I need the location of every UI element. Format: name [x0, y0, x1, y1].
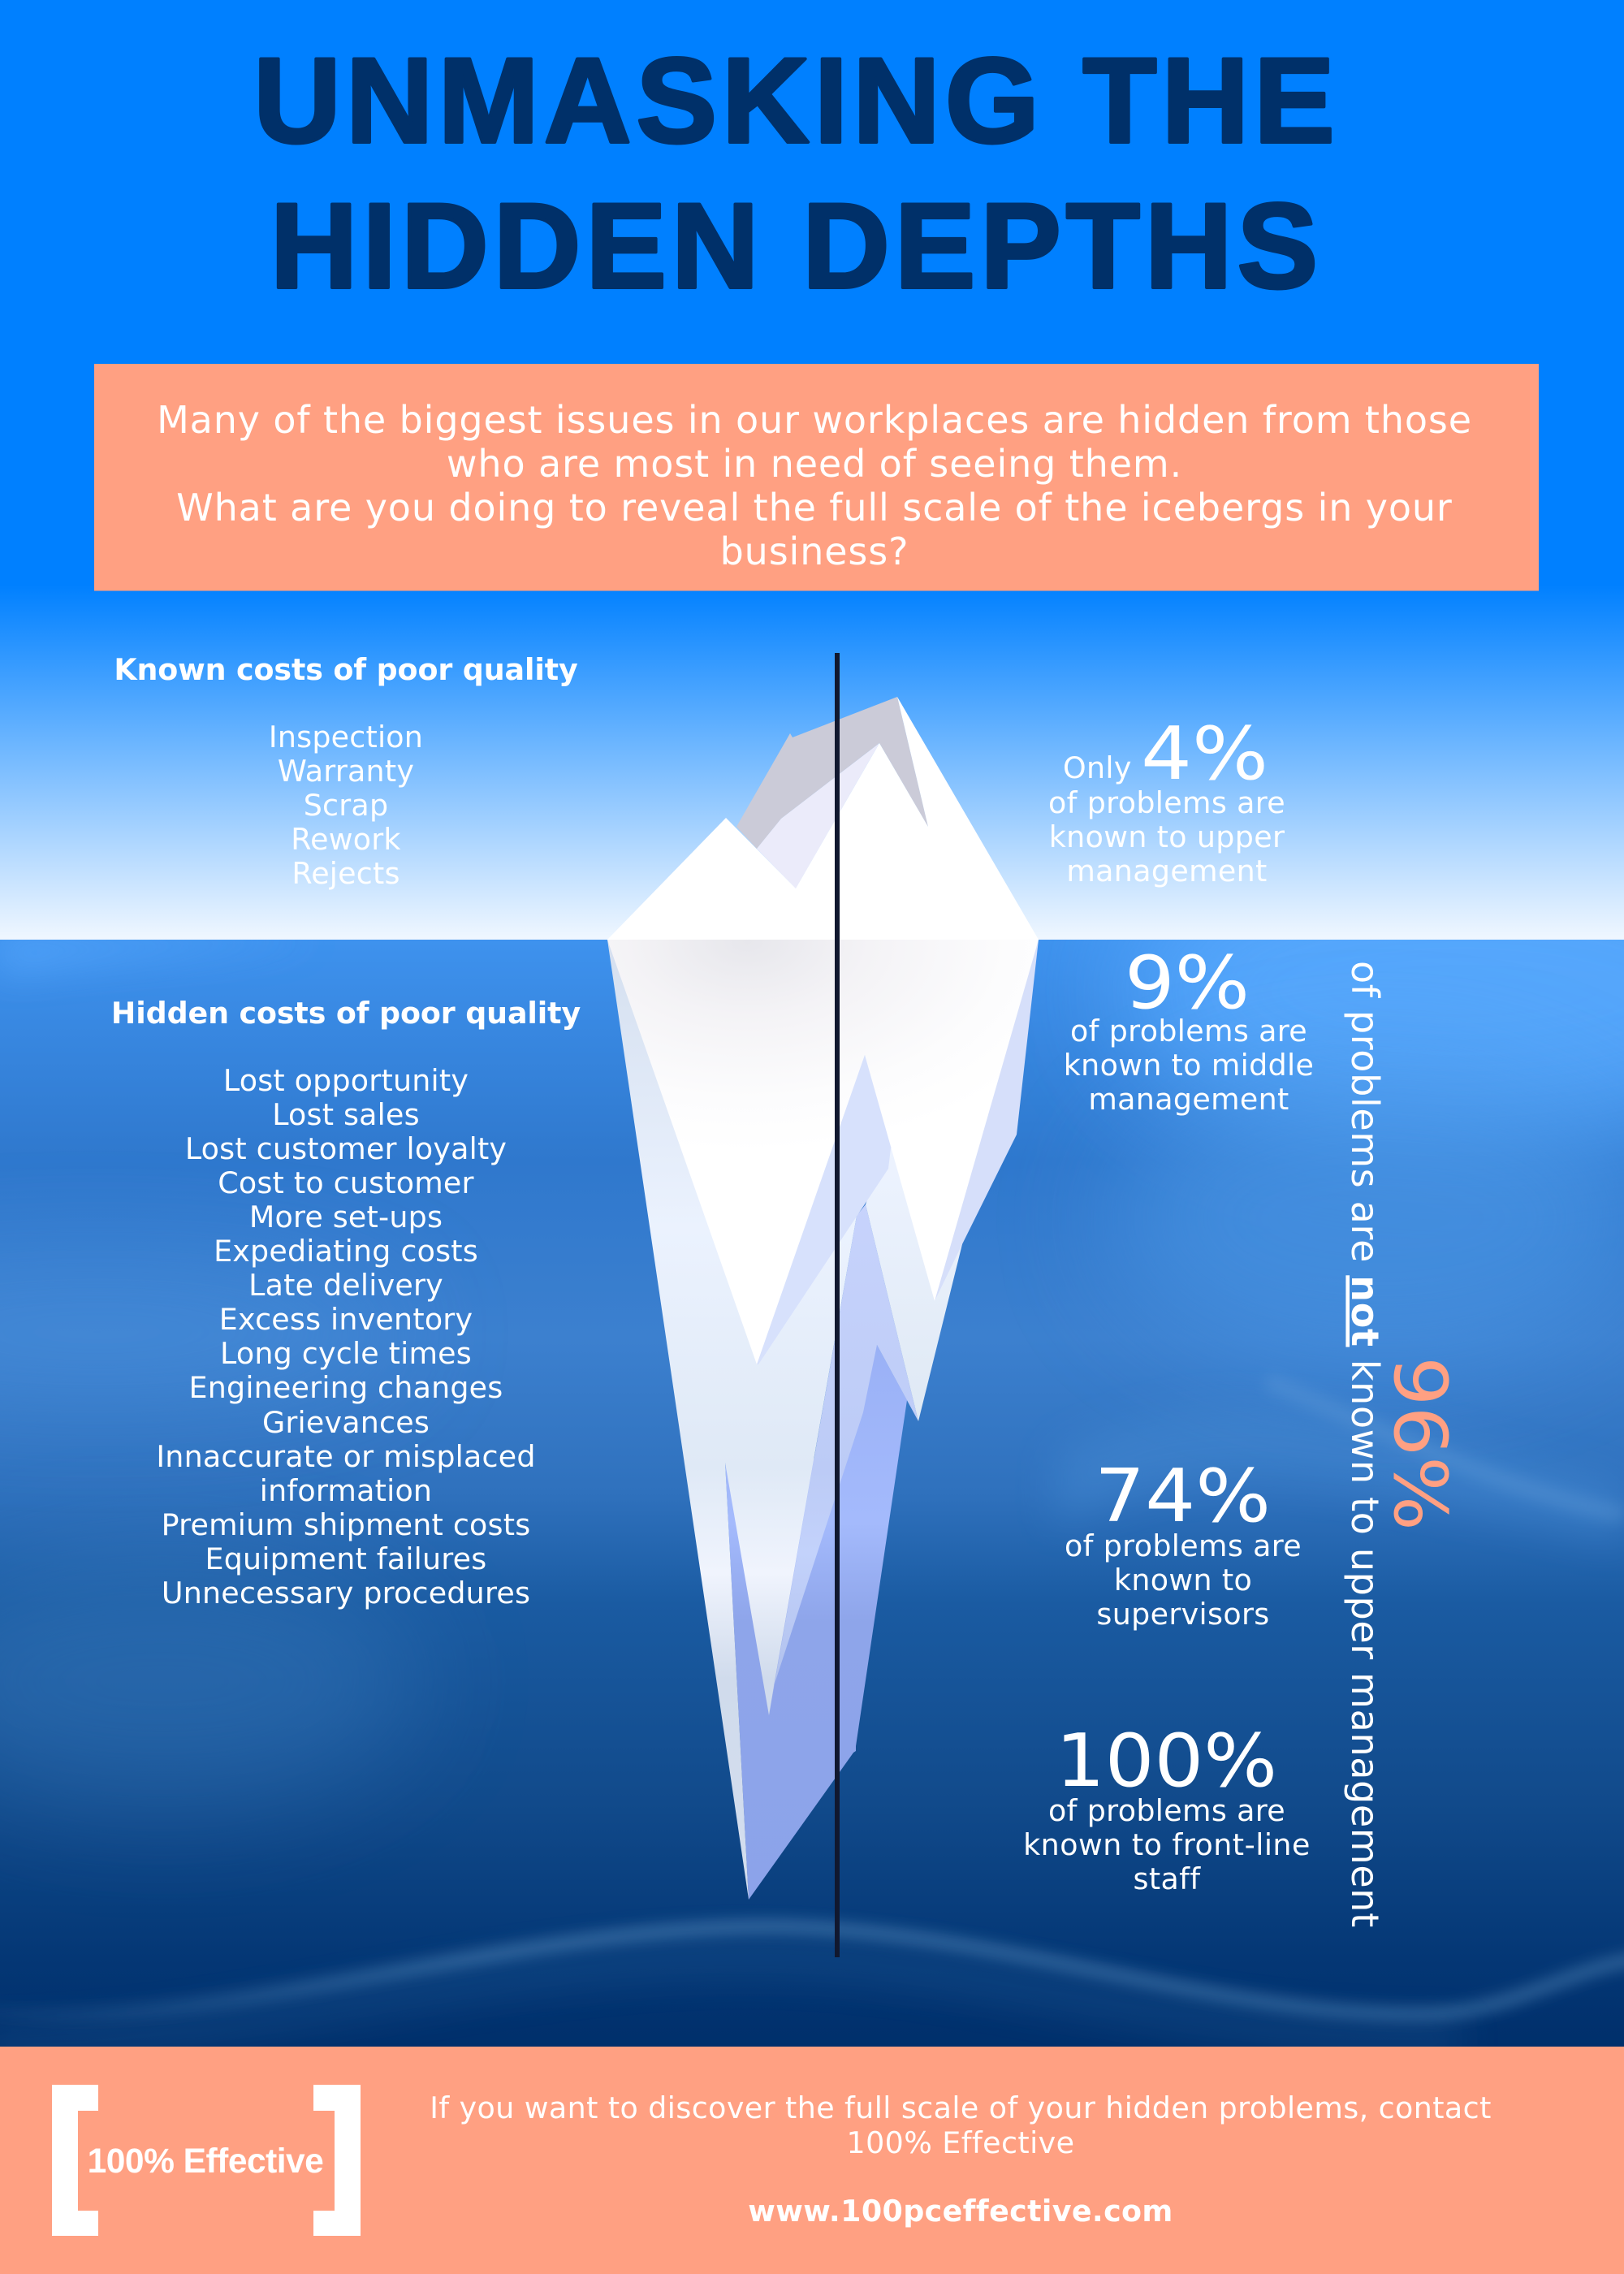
stat: 4 percent upper management: Only [1063, 750, 1132, 785]
stat: 74 percent supervisors: 74% [1095, 1454, 1271, 1539]
hidden costs list: Innaccurate or misplaced [156, 1439, 536, 1474]
title: UNMASKING THE [253, 32, 1340, 168]
vertical 96 percent: 96% [1377, 1356, 1462, 1531]
stat: 4 percent upper management: of problems are [1048, 785, 1285, 820]
hidden costs list: Lost opportunity [223, 1063, 469, 1098]
stat: 9 percent middle management: of problems are [1070, 1014, 1307, 1048]
known costs list: Warranty [278, 754, 414, 789]
stat: 4 percent upper management: management [1066, 854, 1268, 888]
known costs list: Rework [291, 822, 401, 857]
title: HIDDEN DEPTHS [270, 178, 1323, 313]
stat: 9 percent middle management [1064, 940, 1314, 1117]
hidden costs list: Cost to customer [218, 1165, 474, 1200]
iceberg: mid blue facet [769, 1204, 918, 1715]
call to action: If you want to discover the full scale of your hidden problems, contact [430, 2090, 1492, 2125]
iceberg: pale left body [607, 940, 888, 1900]
hidden costs list: Grievances [262, 1405, 430, 1440]
stat: 9 percent middle management: 9% [1125, 940, 1250, 1026]
sky background [0, 0, 1624, 940]
iceberg: lavender centre facet [757, 1055, 897, 1364]
iceberg: pale right facet [866, 1137, 962, 1421]
hidden costs list: Excess inventory [219, 1302, 473, 1337]
hidden costs list: Lost sales [272, 1097, 420, 1132]
stat: 100 percent front-line staff: known to front-line [1023, 1827, 1311, 1862]
iceberg: white main underwater face [607, 940, 1039, 1364]
call to action [430, 2090, 1492, 2229]
stat: 100 percent front-line staff: staff [1134, 1861, 1201, 1896]
vertical statement: of problems are not known to upper management [1343, 961, 1387, 1928]
hidden costs list: Hidden costs of poor quality [111, 996, 581, 1031]
stat: 4 percent upper management: known to upper [1049, 819, 1285, 854]
intro panel [94, 364, 1539, 591]
logo: 100% Effective [88, 2142, 323, 2181]
stat: 9 percent middle management: management [1088, 1082, 1289, 1117]
hidden costs list: More set-ups [249, 1200, 443, 1234]
hidden costs list: Late delivery [248, 1268, 443, 1303]
iceberg: back peak shadow [736, 697, 928, 849]
iceberg illustration [607, 697, 1039, 1900]
iceberg: lavender peak face [757, 743, 879, 888]
hidden costs list: Lost customer loyalty [185, 1131, 507, 1166]
hidden costs list: Premium shipment costs [162, 1507, 530, 1542]
intro panel: business? [720, 530, 909, 573]
vertical divider line [835, 653, 840, 1957]
stat: 100 percent front-line staff [1023, 1718, 1311, 1896]
iceberg: white front above water [607, 697, 1039, 940]
stat: 74 percent supervisors: of problems are [1065, 1528, 1302, 1563]
known costs list: Rejects [292, 856, 400, 891]
call to action: www.100pceffective.com [748, 2194, 1173, 2229]
stat: 100 percent front-line staff: 100% [1056, 1718, 1277, 1804]
known costs list: Known costs of poor quality [114, 652, 578, 687]
stat: 4 percent upper management [1048, 711, 1285, 888]
logo [52, 2085, 361, 2236]
intro panel: What are you doing to reveal the full scale of the icebergs in your [176, 486, 1453, 530]
iceberg: lavender right facet [935, 940, 1039, 1301]
intro panel: who are most in need of seeing them. [447, 442, 1182, 486]
stat: 100 percent front-line staff: of problems are [1048, 1793, 1285, 1828]
hidden costs list: information [260, 1473, 432, 1508]
known costs list [114, 652, 578, 891]
sea background with soft waves [0, 837, 1624, 2047]
hidden costs list: Unnecessary procedures [162, 1576, 530, 1610]
stat: 74 percent supervisors: supervisors [1096, 1597, 1270, 1632]
hidden costs list: Long cycle times [220, 1336, 472, 1371]
hidden costs list: Expediating costs [214, 1234, 478, 1269]
hidden costs list [111, 996, 581, 1610]
stat: 74 percent supervisors [1065, 1454, 1302, 1632]
footer panel [0, 2047, 1624, 2274]
known costs list: Inspection [269, 720, 423, 754]
hidden costs list: Engineering changes [189, 1370, 503, 1405]
stat: 4 percent upper management: 4% [1141, 711, 1268, 797]
call to action: 100% Effective [847, 2125, 1074, 2160]
stat: 9 percent middle management: known to middle [1064, 1048, 1314, 1083]
stat: 74 percent supervisors: known to [1114, 1563, 1252, 1597]
title [253, 32, 1340, 313]
intro panel: Many of the biggest issues in our workplaces are hidden from those [157, 398, 1472, 442]
known costs list: Scrap [304, 788, 388, 823]
iceberg: deep blue underside [725, 1345, 907, 1900]
hidden costs list: Equipment failures [205, 1541, 486, 1576]
